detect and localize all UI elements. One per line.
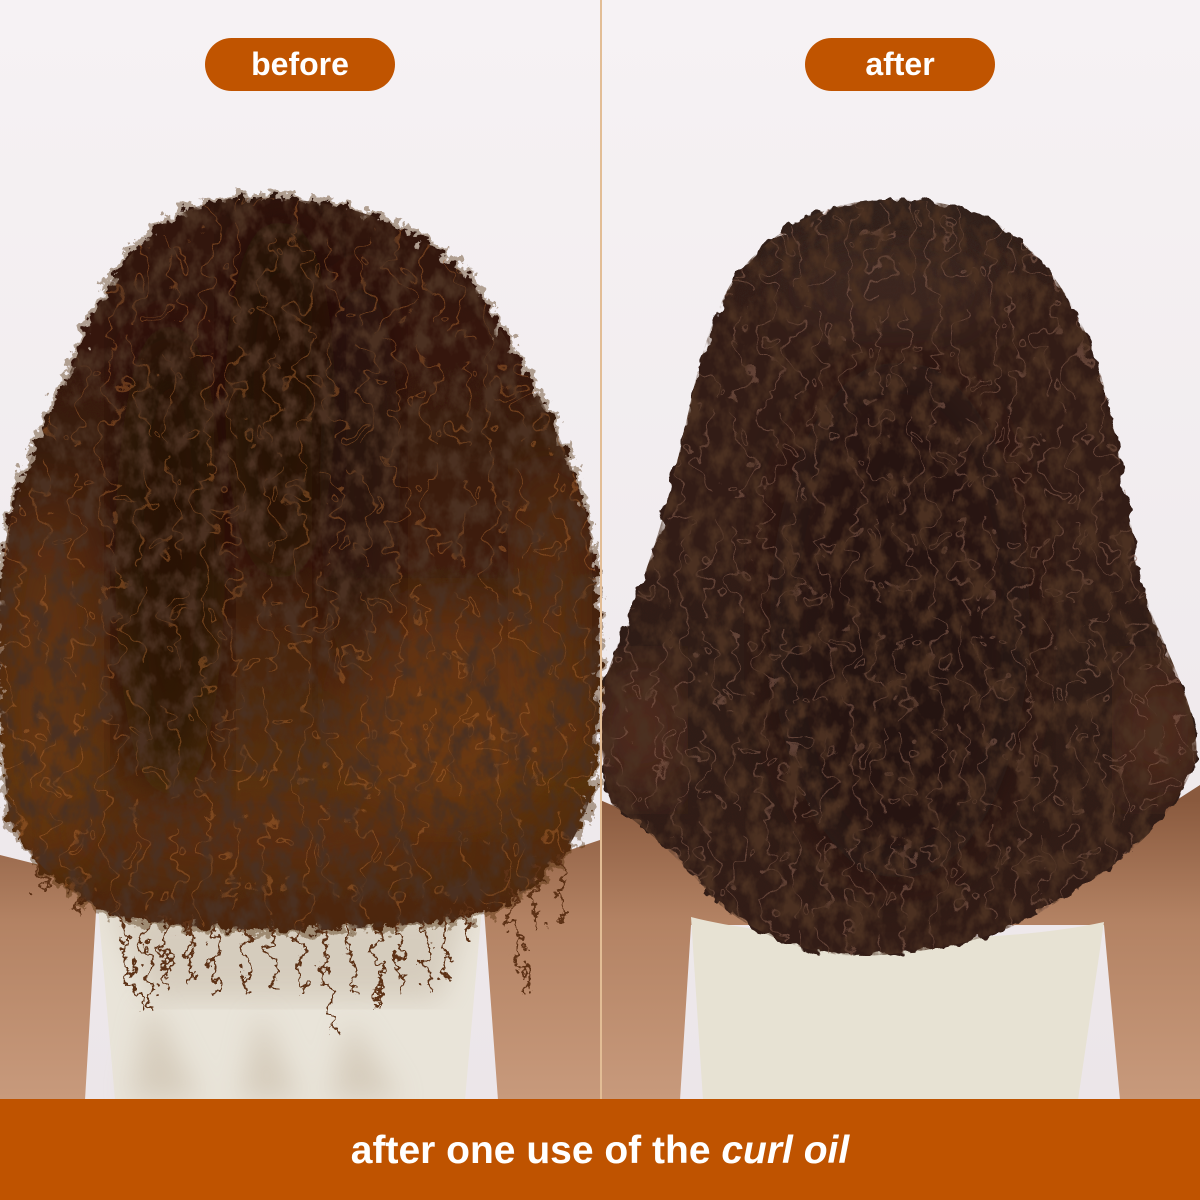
right background [600, 0, 1200, 1100]
after label: after [865, 46, 935, 82]
after: hair [600, 190, 1200, 970]
after label [805, 38, 995, 91]
caption band: after one use of the curl oil [351, 1129, 849, 1172]
left background [0, 0, 600, 1100]
before: model body [0, 840, 600, 1100]
before: hair shading [0, 210, 585, 880]
before label [205, 38, 395, 91]
after: model body [600, 785, 1200, 1100]
before label: before [251, 46, 349, 82]
before: curl texture [0, 190, 600, 940]
before: hair [0, 190, 600, 1033]
centre divider [600, 0, 602, 1100]
after: hair shading [600, 240, 1200, 880]
after: curl texture [600, 190, 1200, 970]
caption band [0, 1099, 1200, 1200]
